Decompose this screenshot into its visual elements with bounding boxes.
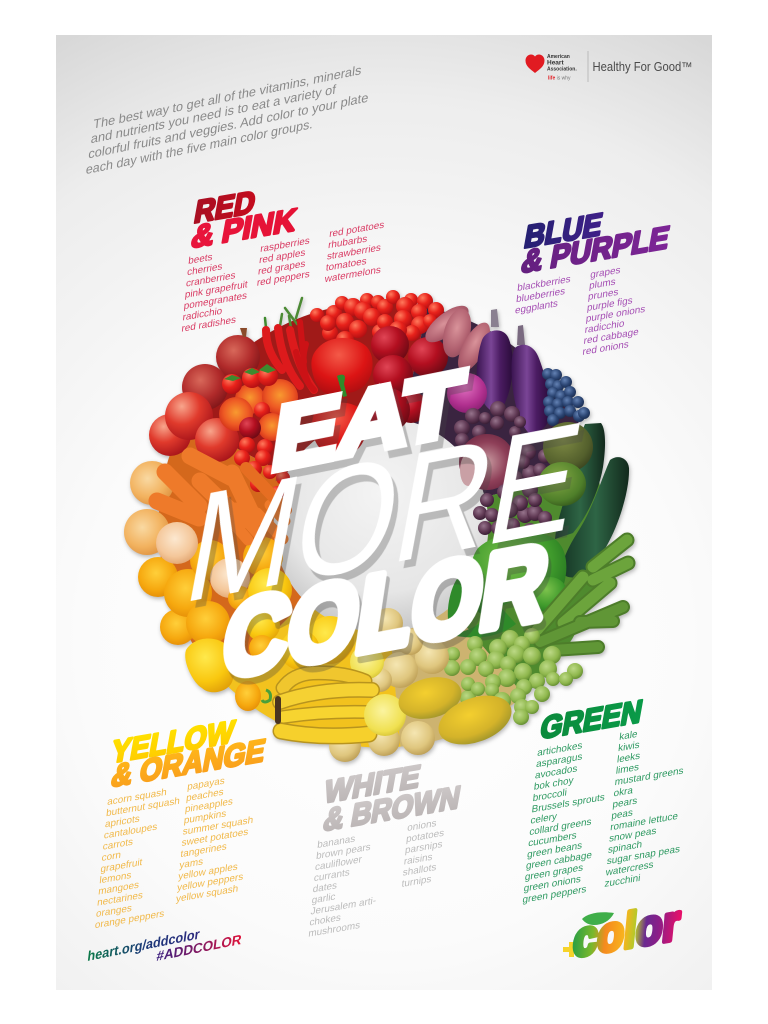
icon: red heart and torch bbox=[526, 54, 544, 73]
list: purple column one: blackberries bbox=[517, 274, 571, 294]
list: green column one: celery bbox=[530, 811, 557, 827]
list: yellow column two: yams bbox=[179, 856, 204, 871]
list: green column two: limes bbox=[615, 762, 639, 777]
association wordmark: life is why bbox=[548, 76, 571, 82]
intro paragraph: each day with the five main color groups. bbox=[85, 116, 314, 177]
blueberries bbox=[542, 368, 590, 426]
list: purple column two: radicchio bbox=[584, 318, 625, 336]
colour ring underlay bbox=[216, 360, 546, 690]
red apples bbox=[366, 326, 448, 432]
list: green column one: green beans bbox=[527, 840, 583, 861]
list: green column two: pears bbox=[612, 796, 638, 811]
heading: red and pink: & PINK bbox=[189, 202, 300, 255]
list: green column two: snow peas bbox=[609, 826, 657, 845]
list: white column two: onions bbox=[407, 818, 437, 834]
radicchio bbox=[459, 434, 515, 490]
list: green column one: green onions bbox=[523, 874, 581, 895]
colour wordmark: color bbox=[571, 893, 683, 968]
list: purple column two: purple figs bbox=[586, 295, 633, 314]
star fruits bbox=[394, 671, 518, 754]
list: white column one: dates bbox=[312, 880, 338, 895]
zucchini bbox=[555, 423, 629, 577]
heading: color: COLOR bbox=[215, 521, 555, 702]
list: yellow column one: acorn squash bbox=[107, 787, 167, 808]
list: green column one: avocados bbox=[534, 763, 578, 782]
list: white column two: parsnips bbox=[404, 839, 443, 856]
icon: leaf bbox=[582, 912, 614, 925]
list: purple column two: red cabbage bbox=[583, 327, 640, 347]
list: white column two: shallots bbox=[402, 862, 437, 879]
avocados bbox=[538, 422, 593, 506]
food colour wheel bbox=[124, 290, 629, 762]
list: yellow column two: yellow peppers bbox=[177, 872, 244, 894]
logo: plus color bbox=[563, 893, 683, 968]
green pepper ring bbox=[448, 570, 516, 638]
list: green column one: green grapes bbox=[524, 862, 584, 883]
list: white column one: chokes bbox=[309, 912, 341, 929]
red bell pepper bbox=[311, 338, 373, 394]
list: yellow column two: pineapples bbox=[184, 796, 233, 815]
centre hole bbox=[269, 413, 493, 637]
list: green column one: collard greens bbox=[529, 817, 592, 838]
list: red column one: cherries bbox=[187, 261, 223, 278]
list: red column two: red grapes bbox=[257, 259, 306, 278]
list: white column two: turnips bbox=[401, 874, 432, 890]
purple grapes bbox=[454, 401, 526, 447]
list: white column one: brown pears bbox=[316, 842, 371, 862]
list: white column one: bananas bbox=[317, 834, 356, 851]
list: green column two: kale bbox=[619, 729, 638, 743]
heading: white and brown: WHITE bbox=[322, 758, 423, 810]
list: green column one: cucumbers bbox=[528, 830, 577, 849]
list: yellow column two: papayas bbox=[187, 776, 225, 793]
list: yellow column one: butternut squash bbox=[106, 796, 180, 819]
list: green column one: bok choy bbox=[533, 775, 574, 793]
panel: yellow and orange bbox=[94, 714, 268, 931]
yellow peppers and squash bbox=[185, 568, 384, 711]
panel: red and pink bbox=[181, 184, 386, 335]
list: yellow column one: oranges bbox=[96, 903, 132, 920]
panel: white and brown bbox=[308, 758, 463, 940]
heading: blue and purple: & PURPLE bbox=[519, 219, 672, 280]
list: purple column one: blueberries bbox=[516, 286, 566, 305]
dark grapes bbox=[473, 444, 552, 537]
list: red column three: watermelons bbox=[323, 265, 381, 285]
list: white column one: mushrooms bbox=[308, 920, 361, 940]
list: yellow column two: tangerines bbox=[180, 841, 227, 860]
carrots bbox=[157, 456, 286, 540]
association wordmark bbox=[547, 54, 577, 82]
red and pink foods bbox=[149, 290, 448, 500]
list: yellow column one: lemons bbox=[99, 870, 132, 886]
red chili peppers bbox=[265, 298, 314, 390]
list: yellow column one: nectarines bbox=[97, 890, 143, 909]
list: purple column one: eggplants bbox=[514, 298, 558, 317]
list: green column one: Brussels sprouts bbox=[531, 792, 605, 815]
list: yellow column two: yellow apples bbox=[178, 862, 238, 883]
list: green column two: spinach bbox=[607, 839, 643, 856]
cherry tomatoes bbox=[310, 290, 444, 349]
list: red column two: red apples bbox=[259, 248, 306, 266]
lower red pepper bbox=[312, 403, 366, 454]
list: yellow column two: pumpkins bbox=[183, 808, 227, 827]
list: green column two: romaine lettuce bbox=[610, 811, 679, 833]
okra bbox=[537, 540, 628, 650]
list: yellow column two: summer squash bbox=[182, 815, 254, 838]
list: red column three: strawberries bbox=[326, 243, 381, 263]
peaches and oranges bbox=[124, 461, 283, 645]
list: green column two: zucchini bbox=[604, 873, 641, 890]
list: white column one: Jerusalem arti- bbox=[310, 896, 377, 918]
poster background bbox=[56, 35, 712, 990]
intro paragraph: colorful fruits and veggies. Add color to your plate bbox=[88, 90, 369, 161]
hashtag: #ADDCOLOR bbox=[156, 932, 242, 965]
heading: green: GREEN bbox=[538, 693, 645, 746]
heading: blue and purple: BLUE bbox=[522, 206, 605, 255]
list: red column three: rhubarbs bbox=[328, 234, 368, 251]
list: yellow column two: yellow squash bbox=[176, 884, 239, 905]
sweet potatoes bbox=[420, 299, 496, 376]
list: yellow column one: cantaloupes bbox=[103, 822, 158, 842]
yellow apple bbox=[364, 694, 406, 736]
list: green column two: watercress bbox=[604, 860, 654, 879]
cherries bbox=[234, 437, 290, 500]
list: purple column two: plums bbox=[589, 277, 616, 292]
list: red column one: pink grapefruit bbox=[184, 279, 248, 301]
list: purple column two: grapes bbox=[590, 265, 621, 281]
blue and purple foods bbox=[420, 299, 590, 537]
list: green column one: asparagus bbox=[536, 752, 583, 770]
web address: heart.org/addcolor bbox=[87, 927, 201, 965]
list: green column two: okra bbox=[613, 785, 634, 799]
green bell pepper bbox=[471, 532, 566, 614]
intro paragraph: The best way to get all of the vitamins, minerals bbox=[93, 62, 363, 132]
heading: white and brown: & BROWN bbox=[321, 779, 463, 838]
list: white column one: cauliflower bbox=[314, 854, 363, 873]
list: green column one: artichokes bbox=[537, 740, 583, 759]
strawberries bbox=[222, 364, 278, 394]
green foods bbox=[444, 422, 629, 725]
pink onion bbox=[447, 373, 487, 413]
list: yellow column one: apricots bbox=[104, 814, 140, 830]
eggplants bbox=[477, 309, 550, 434]
list: red column one: beets bbox=[188, 252, 213, 267]
list: red column two: raspberries bbox=[260, 236, 310, 255]
heading: yellow and orange: & ORANGE bbox=[109, 732, 268, 794]
list: red column two: red peppers bbox=[256, 269, 310, 289]
potatoes bbox=[329, 608, 449, 762]
white and brown foods bbox=[329, 608, 449, 762]
bananas bbox=[278, 673, 372, 736]
list: green column two: leeks bbox=[616, 751, 641, 766]
list: yellow column two: sweet potatoes bbox=[181, 827, 249, 849]
association wordmark: Heart bbox=[547, 60, 564, 66]
icon: plus sign bbox=[563, 942, 580, 957]
list: yellow column one: corn bbox=[101, 850, 121, 864]
list: purple column two: purple onions bbox=[585, 304, 646, 325]
panel: green bbox=[522, 693, 693, 906]
list: green column one: green peppers bbox=[522, 884, 587, 906]
list: yellow column one: orange peppers bbox=[94, 908, 165, 931]
list: green column one: broccoli bbox=[532, 787, 567, 804]
heading: more: MORE bbox=[174, 387, 594, 636]
list: white column one: currants bbox=[313, 867, 350, 884]
yellow foods bbox=[185, 568, 518, 754]
list: green column two: sugar snap peas bbox=[606, 844, 680, 867]
list: red column one: pomegranates bbox=[183, 291, 248, 312]
list: green column one: green cabbage bbox=[525, 850, 593, 872]
list: yellow column one: carrots bbox=[102, 837, 134, 853]
list: green column two: kiwis bbox=[618, 740, 640, 754]
list: red column one: radicchio bbox=[182, 306, 223, 323]
intro paragraph bbox=[85, 60, 372, 177]
heading: red and pink: RED bbox=[192, 184, 258, 230]
logo: American Heart Association, Healthy For Good bbox=[526, 51, 692, 82]
list: white column two: raisins bbox=[403, 852, 433, 868]
list: red column three: tomatoes bbox=[325, 256, 367, 274]
list: purple column two: prunes bbox=[588, 287, 619, 303]
orange carrots and citrus bbox=[124, 456, 286, 645]
heading: yellow and orange: YELLOW bbox=[109, 714, 237, 770]
green apple bbox=[532, 577, 568, 613]
green grapes bbox=[444, 628, 583, 725]
list: green column two: peas bbox=[611, 808, 633, 822]
association wordmark: American bbox=[547, 54, 570, 60]
heading: eat: EAT bbox=[266, 350, 470, 491]
list: purple column two: red onions bbox=[582, 339, 629, 358]
pomegranate bbox=[216, 328, 260, 379]
list: green column two: mustard greens bbox=[614, 766, 684, 788]
list: yellow column two: peaches bbox=[186, 787, 224, 804]
list: red column one: cranberries bbox=[185, 270, 236, 290]
list: white column one: garlic bbox=[311, 892, 336, 906]
list: yellow column one: mangoes bbox=[98, 880, 140, 898]
association wordmark: Association. bbox=[547, 66, 577, 72]
list: yellow column one: grapefruit bbox=[100, 857, 143, 875]
list: red column one: red radishes bbox=[181, 315, 236, 335]
healthy for good wordmark: Healthy For Good™ bbox=[592, 60, 692, 74]
list: white column two: potatoes bbox=[406, 828, 445, 845]
list: red column three: red potatoes bbox=[329, 220, 385, 240]
intro paragraph: and nutrients you need is to eat a variety of bbox=[90, 82, 337, 146]
panel: blue and purple bbox=[514, 206, 672, 358]
apples and tomatoes bbox=[149, 364, 298, 462]
